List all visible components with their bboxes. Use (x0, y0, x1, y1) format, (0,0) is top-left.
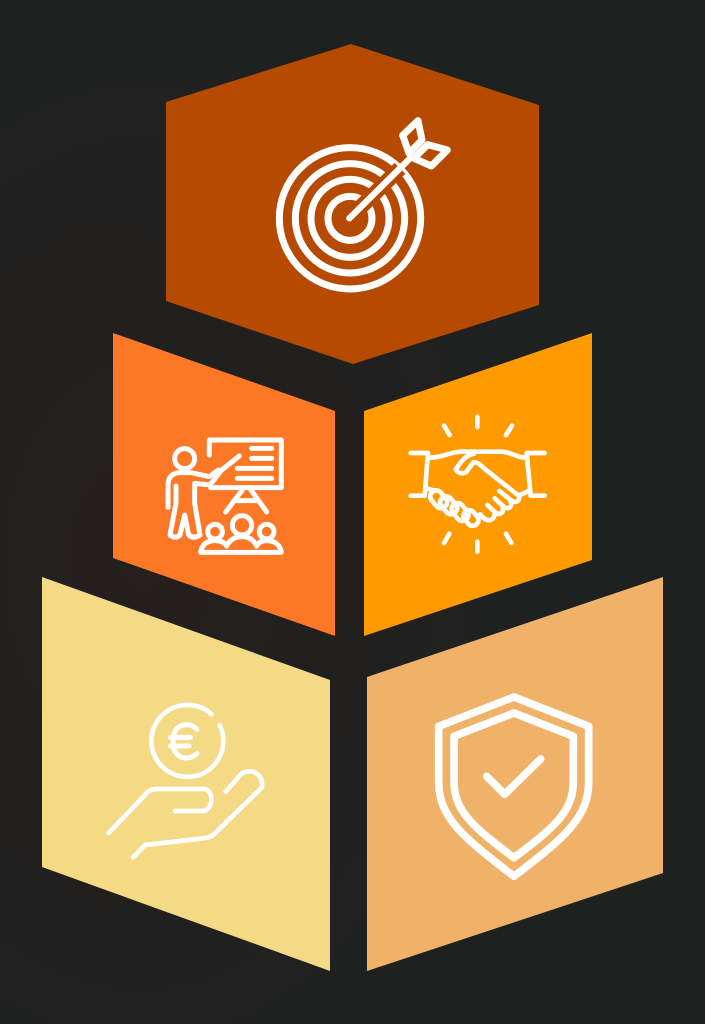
panel: top hexagon with target (166, 44, 539, 364)
panel: middle left presenter (113, 333, 335, 636)
icon: shield with check (439, 697, 589, 876)
icon: target with arrow (279, 121, 447, 289)
icon: hand holding euro coin (109, 705, 262, 858)
panel: bottom left euro hand (42, 577, 330, 971)
icon: presenter with audience (168, 440, 281, 552)
icon: handshake (411, 417, 545, 552)
panel: middle right handshake (364, 333, 592, 636)
panel: bottom right shield (367, 577, 663, 971)
